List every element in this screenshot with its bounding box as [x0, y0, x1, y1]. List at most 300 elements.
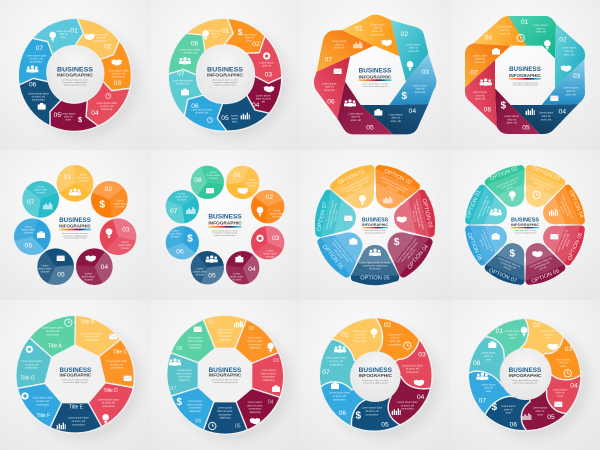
segment 07 [168, 69, 203, 116]
center title: Lorem ipsum dolor sit amet, [512, 81, 539, 84]
text block: Lorem ipsum [248, 337, 262, 340]
segment 03 [389, 53, 436, 105]
text block: sit amet [84, 279, 93, 282]
icon: mail [550, 96, 558, 101]
petal option 08 [462, 213, 514, 267]
option label: OPTION 05 [567, 232, 584, 261]
center title: consectetur adipiscing elit [363, 85, 388, 88]
text block: consectetur elit [480, 234, 489, 250]
text block: Lorem [210, 171, 217, 174]
number 08: 08 [176, 346, 182, 352]
icon: briefcase [38, 103, 46, 110]
text block: Lorem [37, 185, 44, 188]
segment 01 [332, 318, 383, 375]
sector Title A [29, 315, 75, 357]
icon: briefcase [37, 231, 45, 238]
text block: adipiscing [189, 347, 201, 350]
text block: Lorem ipsum dolor sit, [497, 257, 522, 269]
text block: Lorem [80, 173, 87, 176]
number 08: 08 [194, 177, 202, 184]
icon: dollar: $ [394, 237, 400, 248]
icon: briefcase [492, 233, 500, 240]
number 05: 05 [522, 124, 530, 132]
icon: bulb [371, 328, 377, 338]
number 01: 01 [355, 26, 363, 32]
text block: consectetur [72, 423, 85, 426]
text block: Lorem [85, 273, 92, 276]
text block: Lorem ipsum [188, 400, 202, 403]
segment 01 [507, 16, 556, 58]
text block: Lorem ipsum [533, 24, 548, 27]
text block: elit sed do [411, 210, 417, 223]
number 02: 02 [559, 36, 567, 44]
icon: people [344, 99, 356, 107]
text block: ipsum dolor [169, 232, 182, 235]
title: Title B [80, 320, 95, 326]
icon: bulb [544, 40, 551, 50]
icon: dollar: $ [501, 100, 507, 112]
text block: consectetur adipiscing [413, 203, 421, 228]
text block: Lorem [25, 225, 32, 228]
text block: Lorem ipsum [504, 115, 519, 118]
circle 03 [100, 217, 140, 259]
text block: dolor sit [565, 50, 574, 53]
text block: Lorem ipsum dolor [96, 102, 117, 105]
number 08: 08 [473, 360, 481, 367]
center title: BUSINESS [57, 67, 94, 74]
text block: ipsum dolor [264, 252, 277, 255]
petal option 05 [351, 245, 399, 285]
text block: consectetur [219, 413, 232, 416]
center disc [350, 351, 401, 402]
text block: consectetur [189, 343, 202, 346]
number 06: 06 [195, 419, 201, 425]
text block: dolor sit [536, 410, 545, 413]
text block: Lorem ipsum dolor [106, 360, 127, 363]
icon: mail [194, 327, 202, 332]
segment 01 [32, 18, 83, 55]
icon: chart [526, 108, 535, 115]
text block: Lorem ipsum [61, 113, 76, 116]
segment 05 [521, 375, 567, 431]
text block: sit amet [121, 247, 130, 250]
icon: mail [109, 334, 117, 339]
text block: amet [247, 39, 252, 42]
segment 05 [351, 375, 400, 431]
text block: consectetur adipiscing [400, 241, 419, 263]
text block: Lorem ipsum [248, 401, 262, 404]
number 05: 05 [57, 272, 65, 278]
sector Title G [16, 338, 52, 388]
text block: Lorem [231, 114, 238, 117]
text block: Lorem ipsum dolor sit, [557, 229, 569, 253]
number 05: 05 [235, 424, 241, 430]
icon: chart [353, 42, 362, 48]
segment 07 [18, 38, 53, 85]
icon: clock [209, 422, 216, 430]
circle 02 [91, 174, 135, 219]
text block: consectetur elit [533, 261, 550, 270]
segment 08 [168, 33, 205, 75]
icon: people [334, 345, 346, 353]
text block: dolor sit [416, 88, 425, 91]
icon: handshake [237, 188, 248, 194]
option label: OPTION 01 [465, 190, 483, 219]
text block: sit amet, elit [25, 363, 39, 366]
number 07: 07 [479, 398, 486, 404]
segment 02 [375, 318, 419, 375]
segment 03 [542, 59, 585, 105]
text block: ipsum dolor [82, 276, 95, 279]
text block: amet, elit [500, 32, 510, 35]
text block: Lorem ipsum [188, 337, 202, 340]
text block: Lorem ipsum dolor sit, [481, 229, 494, 253]
center title [359, 367, 393, 384]
text block: amet [557, 395, 563, 398]
chart 12: eight curved ring [468, 318, 590, 439]
text block: sit amet [196, 274, 205, 277]
text block: consectetur elit [500, 181, 517, 190]
text block: sit amet [177, 199, 186, 202]
icon: mail [124, 376, 132, 381]
segment 02 [555, 24, 585, 88]
text block: elit sed do [334, 249, 343, 260]
center title: Lorem ipsum dolor sit amet, [62, 379, 89, 382]
text block: ipsum dolor [34, 188, 47, 191]
text block: Lorem ipsum dolor sit, [531, 177, 555, 189]
text block: dolor sit amet, [187, 403, 203, 406]
text block: amet, elit [507, 122, 517, 125]
sector Title F [17, 383, 62, 428]
text block: consectetur [262, 376, 275, 379]
icon: bulb [102, 414, 109, 424]
text block: dolor sit [566, 90, 575, 93]
center title: Lorem ipsum dolor sit amet, [212, 379, 239, 382]
petal option 03 [389, 188, 439, 244]
center heptagon [45, 345, 105, 403]
chart 7: seven option petals [311, 160, 439, 285]
text block: dolor sit [351, 116, 360, 119]
text block: consectetur [249, 343, 262, 346]
text block: Lorem ipsum dolor [32, 397, 53, 400]
icon: gear [264, 53, 269, 59]
text block: adipiscing [101, 108, 113, 111]
text block: ipsum dolor [245, 181, 258, 184]
text block: amet [486, 390, 491, 393]
text block: ipsum dolor [77, 176, 90, 179]
text block: Lorem ipsum [388, 113, 403, 116]
center title: BUSINESS [509, 367, 542, 374]
number 02: 02 [266, 194, 273, 201]
icon: briefcase [349, 238, 357, 245]
number 03: 03 [265, 72, 272, 78]
icon: dollar: $ [187, 234, 193, 244]
circle 01 [57, 165, 93, 202]
icon: briefcase [181, 89, 189, 95]
text block: Lorem ipsum [541, 330, 556, 333]
center title [509, 367, 542, 384]
text block: elit sed do [369, 268, 381, 271]
text block: sit amet, elit [100, 105, 114, 108]
option label: OPTION 04 [407, 244, 430, 271]
text block: dolor sit [544, 333, 553, 336]
center title: INFOGRAPHIC [511, 223, 539, 227]
icon: handshake [561, 65, 571, 72]
number 03: 03 [573, 73, 581, 80]
text block: ipsum dolor [230, 276, 243, 279]
text block: Lorem ipsum [406, 43, 421, 46]
text block: amet [506, 412, 511, 415]
center title: BUSINESS [511, 218, 540, 224]
center title: Lorem ipsum dolor sit amet, [212, 79, 239, 82]
segment 08 [473, 16, 527, 46]
number 08: 08 [485, 34, 492, 42]
center title: INFOGRAPHIC [359, 74, 392, 79]
text block: dolor sit [500, 29, 509, 32]
number 07: 07 [170, 208, 178, 215]
icon: clock [65, 319, 72, 326]
text block: ipsum dolor [22, 228, 35, 231]
text block: Lorem ipsum [473, 91, 487, 94]
text block: sit amet [272, 215, 281, 218]
text block: sit amet, elit [401, 404, 414, 407]
text block: ipsum dolor [39, 267, 52, 270]
sector Title C [99, 339, 134, 388]
text block: adipiscing [249, 411, 261, 414]
text block: sit amet, elit [365, 410, 379, 413]
center title: INFOGRAPHIC [362, 223, 388, 227]
text block: sit amet, elit [195, 111, 209, 114]
text block: Lorem ipsum [556, 358, 571, 361]
center title: consectetur adipiscing elit [213, 381, 238, 384]
text block: dolor sit [325, 86, 334, 89]
text block: Lorem ipsum dolor [362, 407, 383, 410]
number 01: 01 [70, 28, 78, 34]
text block: Lorem ipsum [218, 407, 232, 410]
number 04: 04 [248, 266, 256, 273]
circle 05 [31, 248, 76, 291]
icon: mail [334, 69, 342, 74]
text block: amet [486, 358, 491, 361]
text block: dolor sit [64, 116, 73, 119]
title: Title G [20, 375, 35, 381]
icon: handshake [396, 216, 407, 223]
sector 01 [203, 315, 247, 348]
number 04: 04 [91, 110, 99, 117]
text block: sed do [503, 265, 512, 271]
icon: handshake [532, 251, 543, 257]
text block: dolor sit [508, 333, 517, 336]
text block: consectetur elit [560, 200, 569, 217]
text block: Lorem ipsum dolor sit amet, [415, 199, 425, 230]
text block: sit amet, elit [85, 336, 99, 339]
text block: sit amet [266, 255, 275, 258]
segment 04 [525, 374, 581, 413]
center title: sed do eiusmod tempor [214, 234, 237, 237]
text block: Lorem ipsum dolor [81, 332, 102, 335]
circle 01 [224, 161, 264, 199]
option label: OPTION 05 [360, 275, 390, 281]
text block: elit sed do [386, 185, 398, 193]
number 01: 01 [64, 174, 71, 181]
text block: dolor sit [409, 47, 418, 50]
text block: amet, elit [334, 47, 345, 50]
segment 02 [224, 18, 265, 53]
text block: dolor sit [559, 362, 568, 365]
icon: dollar: $ [492, 402, 498, 413]
number 03: 03 [418, 352, 426, 358]
icon: gear [257, 236, 263, 241]
number 07: 07 [470, 70, 478, 76]
icon: gear [22, 393, 28, 399]
petal option 04 [536, 183, 588, 237]
text block: sit amet, elit [406, 368, 419, 371]
panel: middle row, charts 5 and 6 [10, 161, 289, 291]
center title: INFOGRAPHIC [509, 73, 541, 78]
icon: clock [533, 191, 540, 199]
center title: sed do eiusmod tempor [64, 237, 87, 240]
text block: Lorem [121, 241, 129, 244]
segment 06 [465, 60, 497, 127]
number 02: 02 [105, 186, 112, 193]
number 07: 07 [27, 199, 35, 206]
text block: adipiscing [219, 417, 231, 420]
icon: handshake [111, 59, 122, 66]
text block: consectetur [354, 340, 367, 343]
center title [60, 367, 92, 384]
text block: Lorem ipsum dolor [180, 49, 201, 52]
text block: Lorem ipsum dolor [329, 392, 350, 395]
segment 02 [520, 318, 563, 375]
center title: sed do eiusmod tempor [214, 83, 237, 86]
text block: Lorem ipsum [388, 333, 402, 336]
number 01: 01 [341, 332, 349, 338]
petal option 03 [513, 162, 567, 214]
text block: consectetur [219, 335, 232, 338]
text block: sit amet [79, 179, 88, 182]
text block: adipiscing [263, 379, 275, 382]
text block: dolor sit [262, 65, 271, 68]
text block: sed do [479, 239, 485, 248]
segment 07 [465, 43, 511, 87]
text block: sit amet, elit [29, 57, 43, 60]
number 05: 05 [366, 124, 374, 132]
option label: OPTION 07 [316, 202, 329, 232]
icon: briefcase [488, 341, 496, 348]
text block: dolor sit [335, 43, 344, 46]
center title: consectetur adipiscing elit [363, 381, 388, 384]
center disc [47, 46, 103, 102]
icon: briefcase [374, 109, 382, 116]
text block: dolor sit [391, 117, 400, 120]
text block: amet, elit [324, 89, 335, 92]
text block: Lorem ipsum dolor [402, 364, 423, 367]
chart 10: eight numbered sectors [167, 315, 292, 441]
text block: Lorem [266, 249, 274, 252]
option label: OPTION 03 [420, 198, 433, 228]
text block: sit amet, elit [46, 330, 60, 333]
icon: chart [522, 413, 531, 420]
text block: sit amet, elit [333, 395, 346, 398]
text block: consectetur [333, 398, 346, 401]
number 04: 04 [417, 394, 425, 401]
center title: consectetur adipiscing elit, [212, 81, 238, 84]
segment 03 [246, 36, 282, 83]
text block: dolor sit [59, 33, 68, 36]
text block: amet, elit [541, 118, 551, 121]
text block: amet, elit [351, 119, 361, 122]
number 05: 05 [221, 115, 229, 122]
panel: top row, charts 1 and 2 [18, 18, 289, 139]
number 04: 04 [409, 108, 416, 115]
text block: sit amet, elit [183, 52, 197, 55]
text block: consectetur adipiscing [382, 180, 406, 193]
title: Title A [48, 344, 63, 350]
option label: OPTION 02 [489, 166, 519, 182]
number 01: 01 [521, 19, 529, 26]
icon: mail [554, 402, 562, 407]
center title: Lorem ipsum dolor sit amet, [364, 229, 387, 232]
text block: dolor sit [211, 32, 220, 35]
text block: dolor sit amet, [217, 410, 233, 413]
text block: Lorem ipsum dolor [326, 357, 347, 360]
text block: Lorem ipsum [256, 94, 271, 97]
petal option 01 [327, 160, 388, 217]
text block: dolor sit [542, 115, 551, 118]
text block: Lorem ipsum dolor [26, 54, 47, 57]
segment 01 [485, 318, 528, 375]
icon: dollar: $ [356, 410, 362, 422]
text block: amet, elit [475, 98, 485, 101]
text block: Lorem ipsum [481, 383, 496, 386]
option label: OPTION 04 [567, 190, 584, 219]
center title: INFOGRAPHIC [60, 373, 92, 378]
circle 07 [161, 185, 199, 225]
text block: sit amet [171, 235, 180, 238]
text block: dolor sit amet, [247, 340, 263, 343]
text block: dolor sit amet [256, 97, 271, 100]
center title: BUSINESS [207, 67, 244, 74]
text block: consectetur [30, 60, 43, 63]
icon: bulb [521, 327, 527, 336]
number 03: 03 [565, 346, 572, 353]
number 06: 06 [176, 248, 184, 256]
segment 06 [19, 78, 61, 126]
number 06: 06 [484, 106, 491, 114]
text block: amet [212, 35, 218, 38]
number 07: 07 [322, 369, 330, 376]
text block: consectetur elit [561, 233, 570, 250]
center title: BUSINESS [60, 367, 92, 374]
number 01: 01 [496, 328, 503, 335]
text block: amet [537, 413, 543, 416]
segment 06 [184, 95, 227, 131]
icon: chart [186, 207, 195, 214]
sector 08 [171, 319, 215, 363]
text block: amet, elit [566, 93, 576, 96]
number 04: 04 [559, 108, 566, 116]
center title: BUSINESS [359, 367, 393, 374]
center title: BUSINESS [509, 66, 541, 73]
icon: handshake [264, 86, 274, 92]
text block: sit amet, elit [36, 400, 50, 403]
text block: dolor sit [356, 333, 365, 336]
chart 3: heptagon spiral [314, 15, 436, 134]
text block: Lorem ipsum dolor sit amet, [396, 237, 418, 263]
petal option 01 [462, 183, 514, 237]
center title: BUSINESS [359, 68, 392, 75]
icon: dollar: $ [238, 28, 243, 37]
